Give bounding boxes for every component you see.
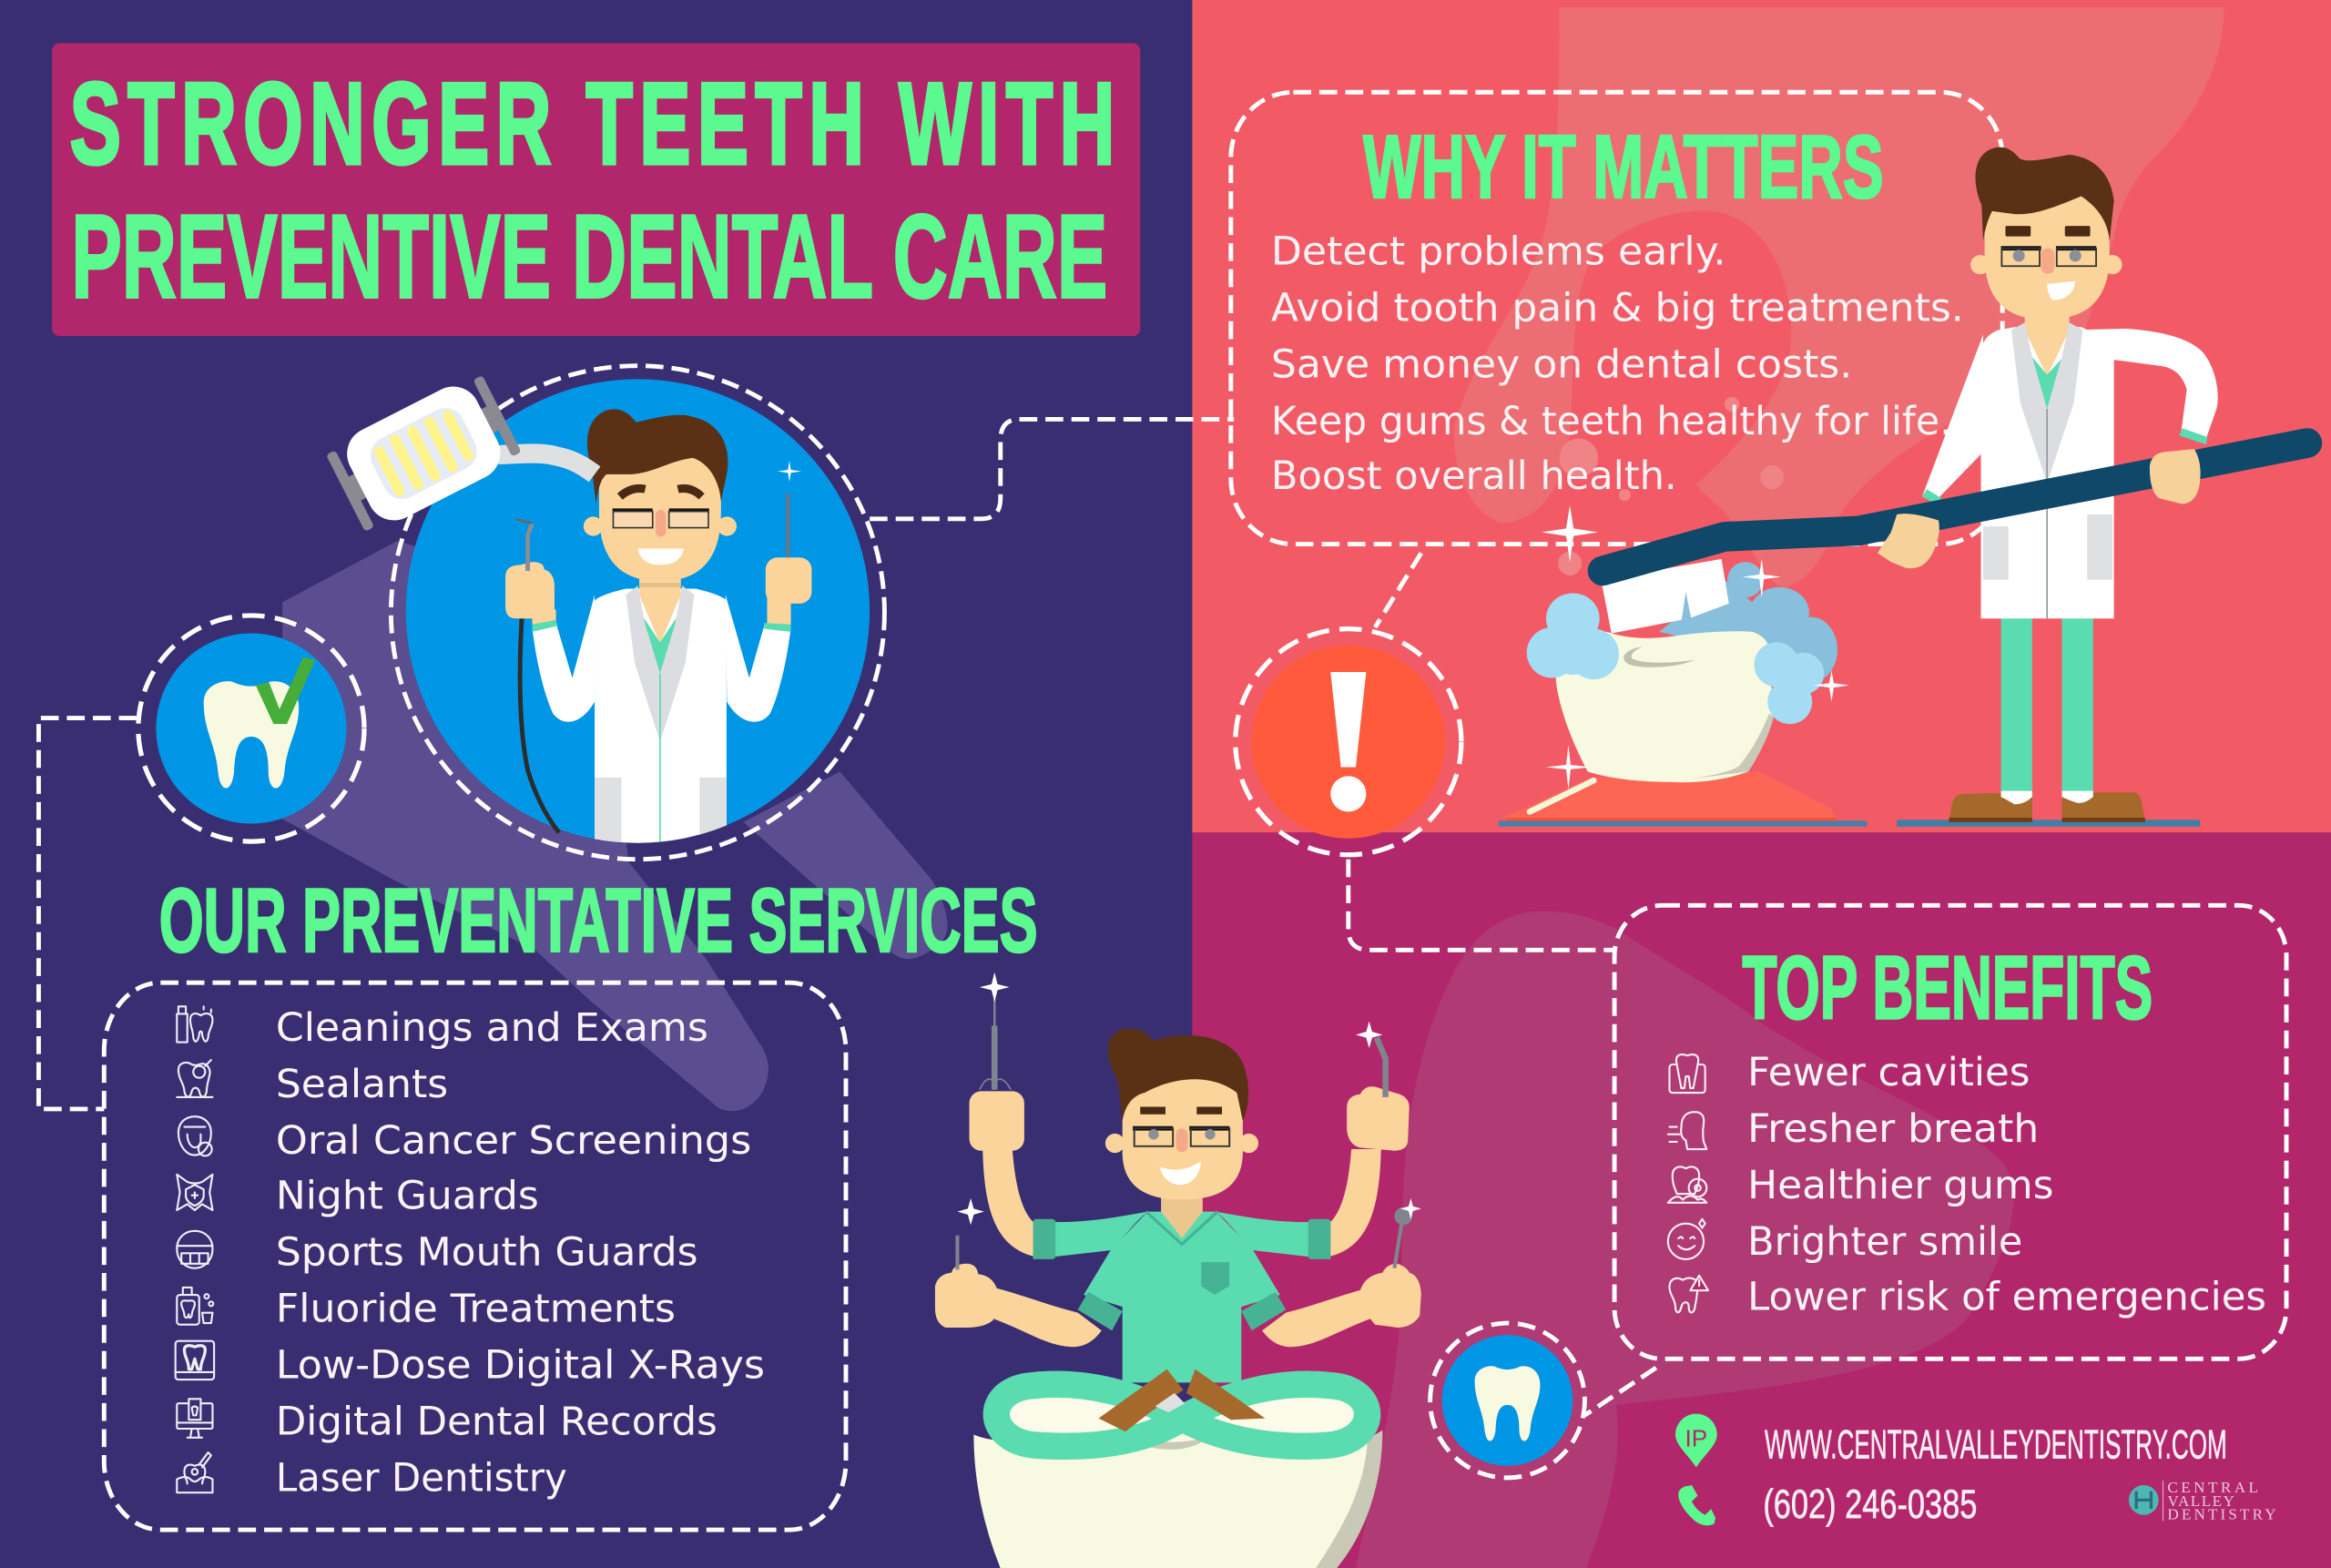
title banner [52, 43, 1140, 336]
ground bars [1499, 820, 1868, 827]
nose [1176, 1128, 1187, 1152]
neck and chest [639, 574, 681, 644]
figure clipped to circle [532, 574, 791, 862]
tooth [204, 681, 299, 789]
icon: phone [1678, 1485, 1715, 1525]
contact: phone: (602) 246-0385 [1763, 1482, 1977, 1527]
icon: location pin: IP [1685, 1425, 1707, 1452]
brows [620, 488, 702, 496]
background panel: left navy [0, 0, 1192, 1568]
base edge [1506, 818, 1836, 822]
icon: cleanings [177, 1006, 212, 1043]
connector: alert to benefits [1349, 860, 1614, 950]
background panel: right top coral [1192, 0, 2331, 832]
dentist hands on brush [1878, 449, 2201, 568]
icon: digital records [177, 1399, 212, 1438]
small tooth circle with check [138, 616, 364, 841]
why it matters text: Save money on dental costs. [1271, 343, 1852, 388]
smile [637, 548, 684, 565]
neck and chest [2025, 306, 2070, 376]
contact: phone [1678, 1482, 1977, 1527]
icon: sports mouth guards [177, 1231, 212, 1268]
icon: oral cancer screening [178, 1116, 212, 1156]
tooth shadow [1690, 714, 1774, 779]
icon: fresher breath [1668, 1112, 1706, 1149]
cuffs [532, 620, 791, 632]
base [1503, 771, 1835, 818]
small tooth circle: benefits [1430, 1323, 1584, 1478]
logo: central valley dentistry: CENTRAL [2167, 1479, 2258, 1496]
toothbrush handle [1603, 443, 2307, 571]
brows [1140, 1108, 1222, 1113]
dental tools [528, 524, 532, 571]
bristles [1601, 559, 1729, 634]
connector: small tooth circle to services [38, 718, 137, 1109]
pocket [1201, 1262, 1229, 1295]
benefits text: Healthier gums [1747, 1164, 2054, 1208]
background tooth shape: magenta [1356, 911, 2014, 1568]
hands [969, 1091, 1024, 1151]
forearm skin [532, 595, 791, 630]
service list text: Sealants [276, 1063, 448, 1107]
crossed legs [996, 1384, 1368, 1446]
service list text: Low-Dose Digital X-Rays [276, 1343, 765, 1388]
background bubbles [1558, 397, 1784, 575]
icon: brighter smile [1668, 1219, 1705, 1259]
light beam: second band [743, 771, 947, 959]
coat [1981, 327, 2114, 618]
glasses [1133, 1127, 1229, 1130]
main circle with dentist [391, 366, 884, 862]
face [1123, 1078, 1243, 1200]
torso [1084, 1212, 1280, 1382]
benefits text [1747, 1051, 2266, 1319]
check mark [256, 657, 315, 724]
glasses [2001, 247, 2096, 249]
cable [520, 618, 559, 832]
glasses [613, 509, 709, 512]
hair [1108, 1029, 1248, 1121]
pockets [1983, 526, 2009, 580]
benefits text: Lower risk of emergencies [1747, 1275, 2266, 1319]
lower arms [993, 1288, 1370, 1347]
title line 2: PREVENTIVE DENTAL CARE [71, 190, 1107, 323]
why it matters text [1271, 230, 1964, 499]
cuffs lower [1078, 1292, 1286, 1330]
hair [587, 409, 728, 504]
tooth body [1556, 631, 1774, 782]
tools [957, 999, 1402, 1269]
heading: our preventative services: OUR PREVENTATIVE SERVICES [159, 871, 1038, 972]
icon: lower risk [1669, 1276, 1708, 1312]
illustration: tooth being brushed [1499, 505, 2200, 827]
connector: why it matters to alert [1375, 553, 1421, 627]
sparkles [957, 972, 1421, 1225]
panel: top benefits [1614, 905, 2286, 1359]
service list text: Cleanings and Exams [276, 1006, 708, 1051]
heading: why it matters: WHY IT MATTERS [1363, 117, 1884, 217]
exclamation mark [1330, 672, 1366, 767]
service list text: Oral Cancer Screenings [276, 1119, 751, 1164]
icon: sealants [177, 1060, 212, 1097]
icon: healthier gums [1668, 1166, 1706, 1203]
why it matters text: Detect problems early. [1271, 230, 1726, 275]
brows [2005, 226, 2031, 237]
service list text: Night Guards [276, 1174, 539, 1218]
service list text: Fluoride Treatments [276, 1287, 676, 1331]
face [1985, 186, 2110, 320]
benefits text: Brighter smile [1747, 1220, 2022, 1265]
service list text: Digital Dental Records [276, 1400, 718, 1445]
cuffs upper [1033, 1219, 1055, 1259]
hair [1976, 148, 2114, 241]
icon: night guards [177, 1175, 212, 1210]
service list text: Laser Dentistry [276, 1457, 567, 1502]
contact: website [1675, 1414, 2227, 1468]
benefits text: Fewer cavities [1747, 1051, 2030, 1095]
lamp [323, 370, 595, 537]
foam back [1659, 562, 1837, 682]
tooth highlight mark [1624, 647, 1695, 667]
illustration: dentist with toothbrush [1922, 148, 2218, 822]
upper arms [1033, 1212, 1330, 1259]
logo: central valley dentistry [2129, 1479, 2276, 1523]
logo: central valley dentistry: VALLEY [2167, 1492, 2234, 1510]
nose [656, 510, 666, 536]
coat sleeves [532, 595, 791, 722]
legs [2001, 613, 2032, 794]
light beam from lamp [282, 541, 769, 1111]
big tooth [973, 1412, 1382, 1568]
illustration: meditating dentist on tooth [935, 972, 1421, 1568]
icon: location pin [1675, 1414, 1717, 1467]
scrubs [644, 617, 677, 674]
service list text [276, 1006, 765, 1502]
lapels [2011, 322, 2082, 484]
background panel: right bottom magenta [1192, 832, 2331, 1568]
service list text: Sports Mouth Guards [276, 1230, 698, 1275]
background tooth shape: coral [1454, 7, 2224, 587]
sparkle [778, 461, 801, 482]
icon: laser [177, 1452, 212, 1492]
scrubs [2028, 355, 2068, 409]
smile [1159, 1161, 1201, 1185]
icon: x-ray [176, 1341, 214, 1380]
icon: fluoride [177, 1288, 213, 1325]
connector: main circle to why it matters [870, 419, 1234, 519]
hands [505, 562, 555, 618]
foam front [1527, 593, 1824, 724]
forearms upper [982, 1149, 1381, 1257]
benefits text: Fresher breath [1747, 1107, 2039, 1152]
why it matters text: Avoid tooth pain & big treatments. [1271, 287, 1964, 331]
shoes [1099, 1369, 1184, 1431]
shoes [1949, 792, 2145, 822]
coat pockets shadow [595, 778, 727, 842]
panel: services [104, 983, 846, 1530]
lapels [626, 585, 694, 742]
why it matters text: Boost overall health. [1271, 454, 1677, 499]
left arm [1922, 334, 1983, 501]
logo: central valley dentistry: DENTISTRY [2167, 1506, 2276, 1523]
alert circle [1236, 629, 1461, 855]
why it matters text: Keep gums & teeth healthy for life. [1271, 400, 1952, 444]
smile [2047, 281, 2075, 300]
nose [2041, 249, 2054, 273]
title line 1: STRONGER TEETH WITH [70, 58, 1115, 188]
face [599, 443, 721, 581]
coat [595, 589, 727, 862]
right arm [2070, 329, 2218, 439]
tooth [1475, 1366, 1540, 1441]
panel: why it matters [1231, 92, 2002, 545]
sparkles [1542, 505, 1849, 789]
icon: fewer cavities [1669, 1054, 1705, 1093]
neck [1161, 1196, 1203, 1238]
connector: benefits to tooth circle [1584, 1368, 1656, 1415]
